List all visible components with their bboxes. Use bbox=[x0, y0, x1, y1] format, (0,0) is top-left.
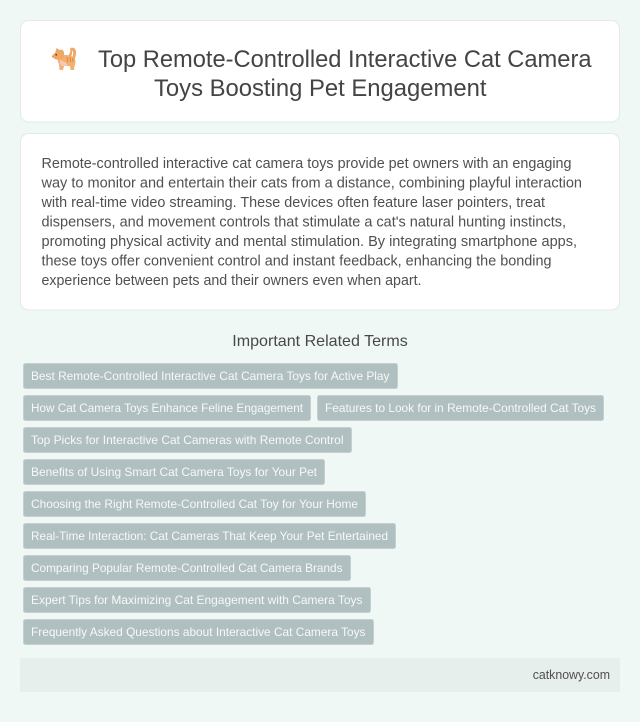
title: Top Remote-Controlled Interactive Cat Camera bbox=[98, 46, 592, 73]
text block: description paragraph: dispensers, and movement controls that stimulate a cat's natural hunting instincts, bbox=[42, 214, 566, 230]
text block: description paragraph: experience between pets and their owners even when apart. bbox=[42, 273, 422, 289]
tag 1: Best Remote-Controlled Interactive Cat Camera Toys for Active Play bbox=[31, 369, 390, 383]
text block: description paragraph: way to monitor and entertain their cats from a distance, combining playful interaction bbox=[41, 176, 582, 192]
icon: cat bbox=[52, 48, 76, 70]
tag 7 bbox=[24, 524, 396, 548]
panel: header bbox=[20, 20, 620, 122]
title bbox=[98, 46, 592, 102]
tag 10 bbox=[24, 620, 374, 644]
tag 10: Frequently Asked Questions about Interactive Cat Camera Toys bbox=[31, 625, 366, 639]
heading: related terms: Important Related Terms bbox=[232, 333, 408, 350]
tag 4 bbox=[24, 428, 352, 452]
tag 6 bbox=[24, 492, 366, 516]
text block: description paragraph: Remote-controlled interactive cat camera toys provide pet owners with an engaging bbox=[42, 156, 572, 172]
tag list: related terms bbox=[24, 364, 604, 644]
tag 7: Real-Time Interaction: Cat Cameras That Keep Your Pet Entertained bbox=[31, 529, 388, 543]
tag 9: Expert Tips for Maximizing Cat Engagement with Camera Toys bbox=[31, 593, 362, 607]
tag 3 bbox=[318, 396, 604, 420]
tag 2: How Cat Camera Toys Enhance Feline Engagement bbox=[31, 401, 304, 415]
tag 1 bbox=[24, 364, 398, 388]
tag 9 bbox=[24, 588, 370, 612]
text block: description paragraph bbox=[41, 156, 582, 289]
tag 3: Features to Look for in Remote-Controlled Cat Toys bbox=[325, 401, 596, 415]
tag 5: Benefits of Using Smart Cat Camera Toys for Your Pet bbox=[31, 465, 318, 479]
text block: description paragraph: promoting physical activity and mental stimulation. By integrating smartphone apps, bbox=[42, 234, 577, 250]
panel: description bbox=[20, 134, 620, 310]
text block: description paragraph: with real-time video streaming. These devices often feature laser pointers, treat bbox=[41, 195, 545, 211]
tag 2 bbox=[24, 396, 310, 420]
tag 6: Choosing the Right Remote-Controlled Cat Toy for Your Home bbox=[31, 497, 358, 511]
tag 5 bbox=[24, 460, 324, 484]
footer bbox=[20, 658, 620, 692]
footer source text: catknowy.com bbox=[533, 668, 610, 682]
title: Toys Boosting Pet Engagement bbox=[154, 75, 487, 102]
tag 8: Comparing Popular Remote-Controlled Cat Camera Brands bbox=[31, 561, 342, 575]
tag 4: Top Picks for Interactive Cat Cameras with Remote Control bbox=[31, 433, 344, 447]
tag 8 bbox=[24, 556, 350, 580]
text block: description paragraph: these toys offer convenient control and instant feedback, enhancing the bonding bbox=[42, 254, 552, 270]
